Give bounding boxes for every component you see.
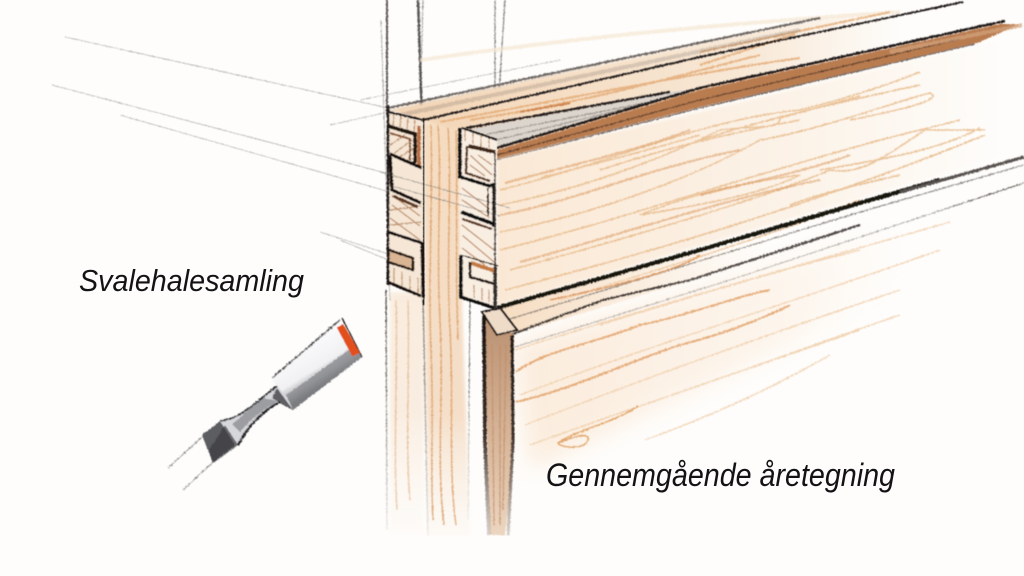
construction lines [52, 37, 600, 298]
left pins [388, 112, 423, 120]
top edge highlight: dark brown band [497, 21, 1022, 160]
grain knot [558, 406, 638, 447]
lower panel with wood grain [513, 205, 960, 470]
icon: chisel [168, 318, 362, 490]
front face of beam with wood grain [497, 40, 1024, 306]
vertical guide lines [381, 0, 505, 535]
right pins [462, 128, 497, 140]
right end grain block [460, 128, 497, 307]
centre post [390, 118, 470, 535]
top face of beam [388, 2, 1000, 150]
lower edge of beam [497, 157, 1024, 347]
label: Gennemgående åretegning: Gennemgående åretegning [546, 457, 895, 493]
leg dark edge [482, 308, 517, 535]
left end grain blocks [388, 112, 423, 300]
dovetail joint [380, 105, 510, 310]
label: Svalehalesamling: Svalehalesamling [79, 263, 304, 298]
